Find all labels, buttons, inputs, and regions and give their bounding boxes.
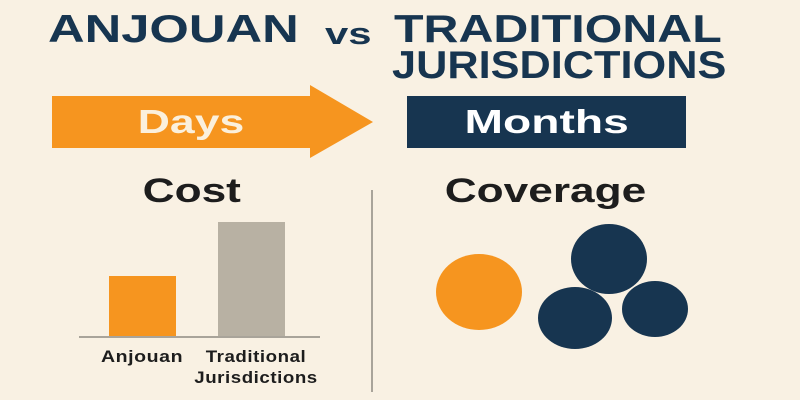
title: vs: vs (325, 16, 372, 51)
bar chart: cost: Traditional (206, 347, 306, 366)
heading: cost: Cost (143, 172, 241, 210)
arrow: days: Days (138, 104, 244, 141)
box: months (407, 96, 686, 148)
coverage circles (436, 224, 688, 349)
heading: coverage: Coverage (444, 172, 646, 210)
divider (371, 190, 373, 392)
bar chart: cost (79, 222, 320, 387)
title: traditional: TRADITIONAL (394, 8, 722, 51)
title: anjouan: ANJOUAN (48, 8, 299, 51)
title: jurisdictions: JURISDICTIONS (392, 44, 726, 87)
bar chart: cost: Anjouan (101, 346, 183, 366)
box: months: Months (464, 103, 629, 140)
title (48, 8, 726, 87)
bar chart: cost: Jurisdictions (194, 368, 318, 387)
